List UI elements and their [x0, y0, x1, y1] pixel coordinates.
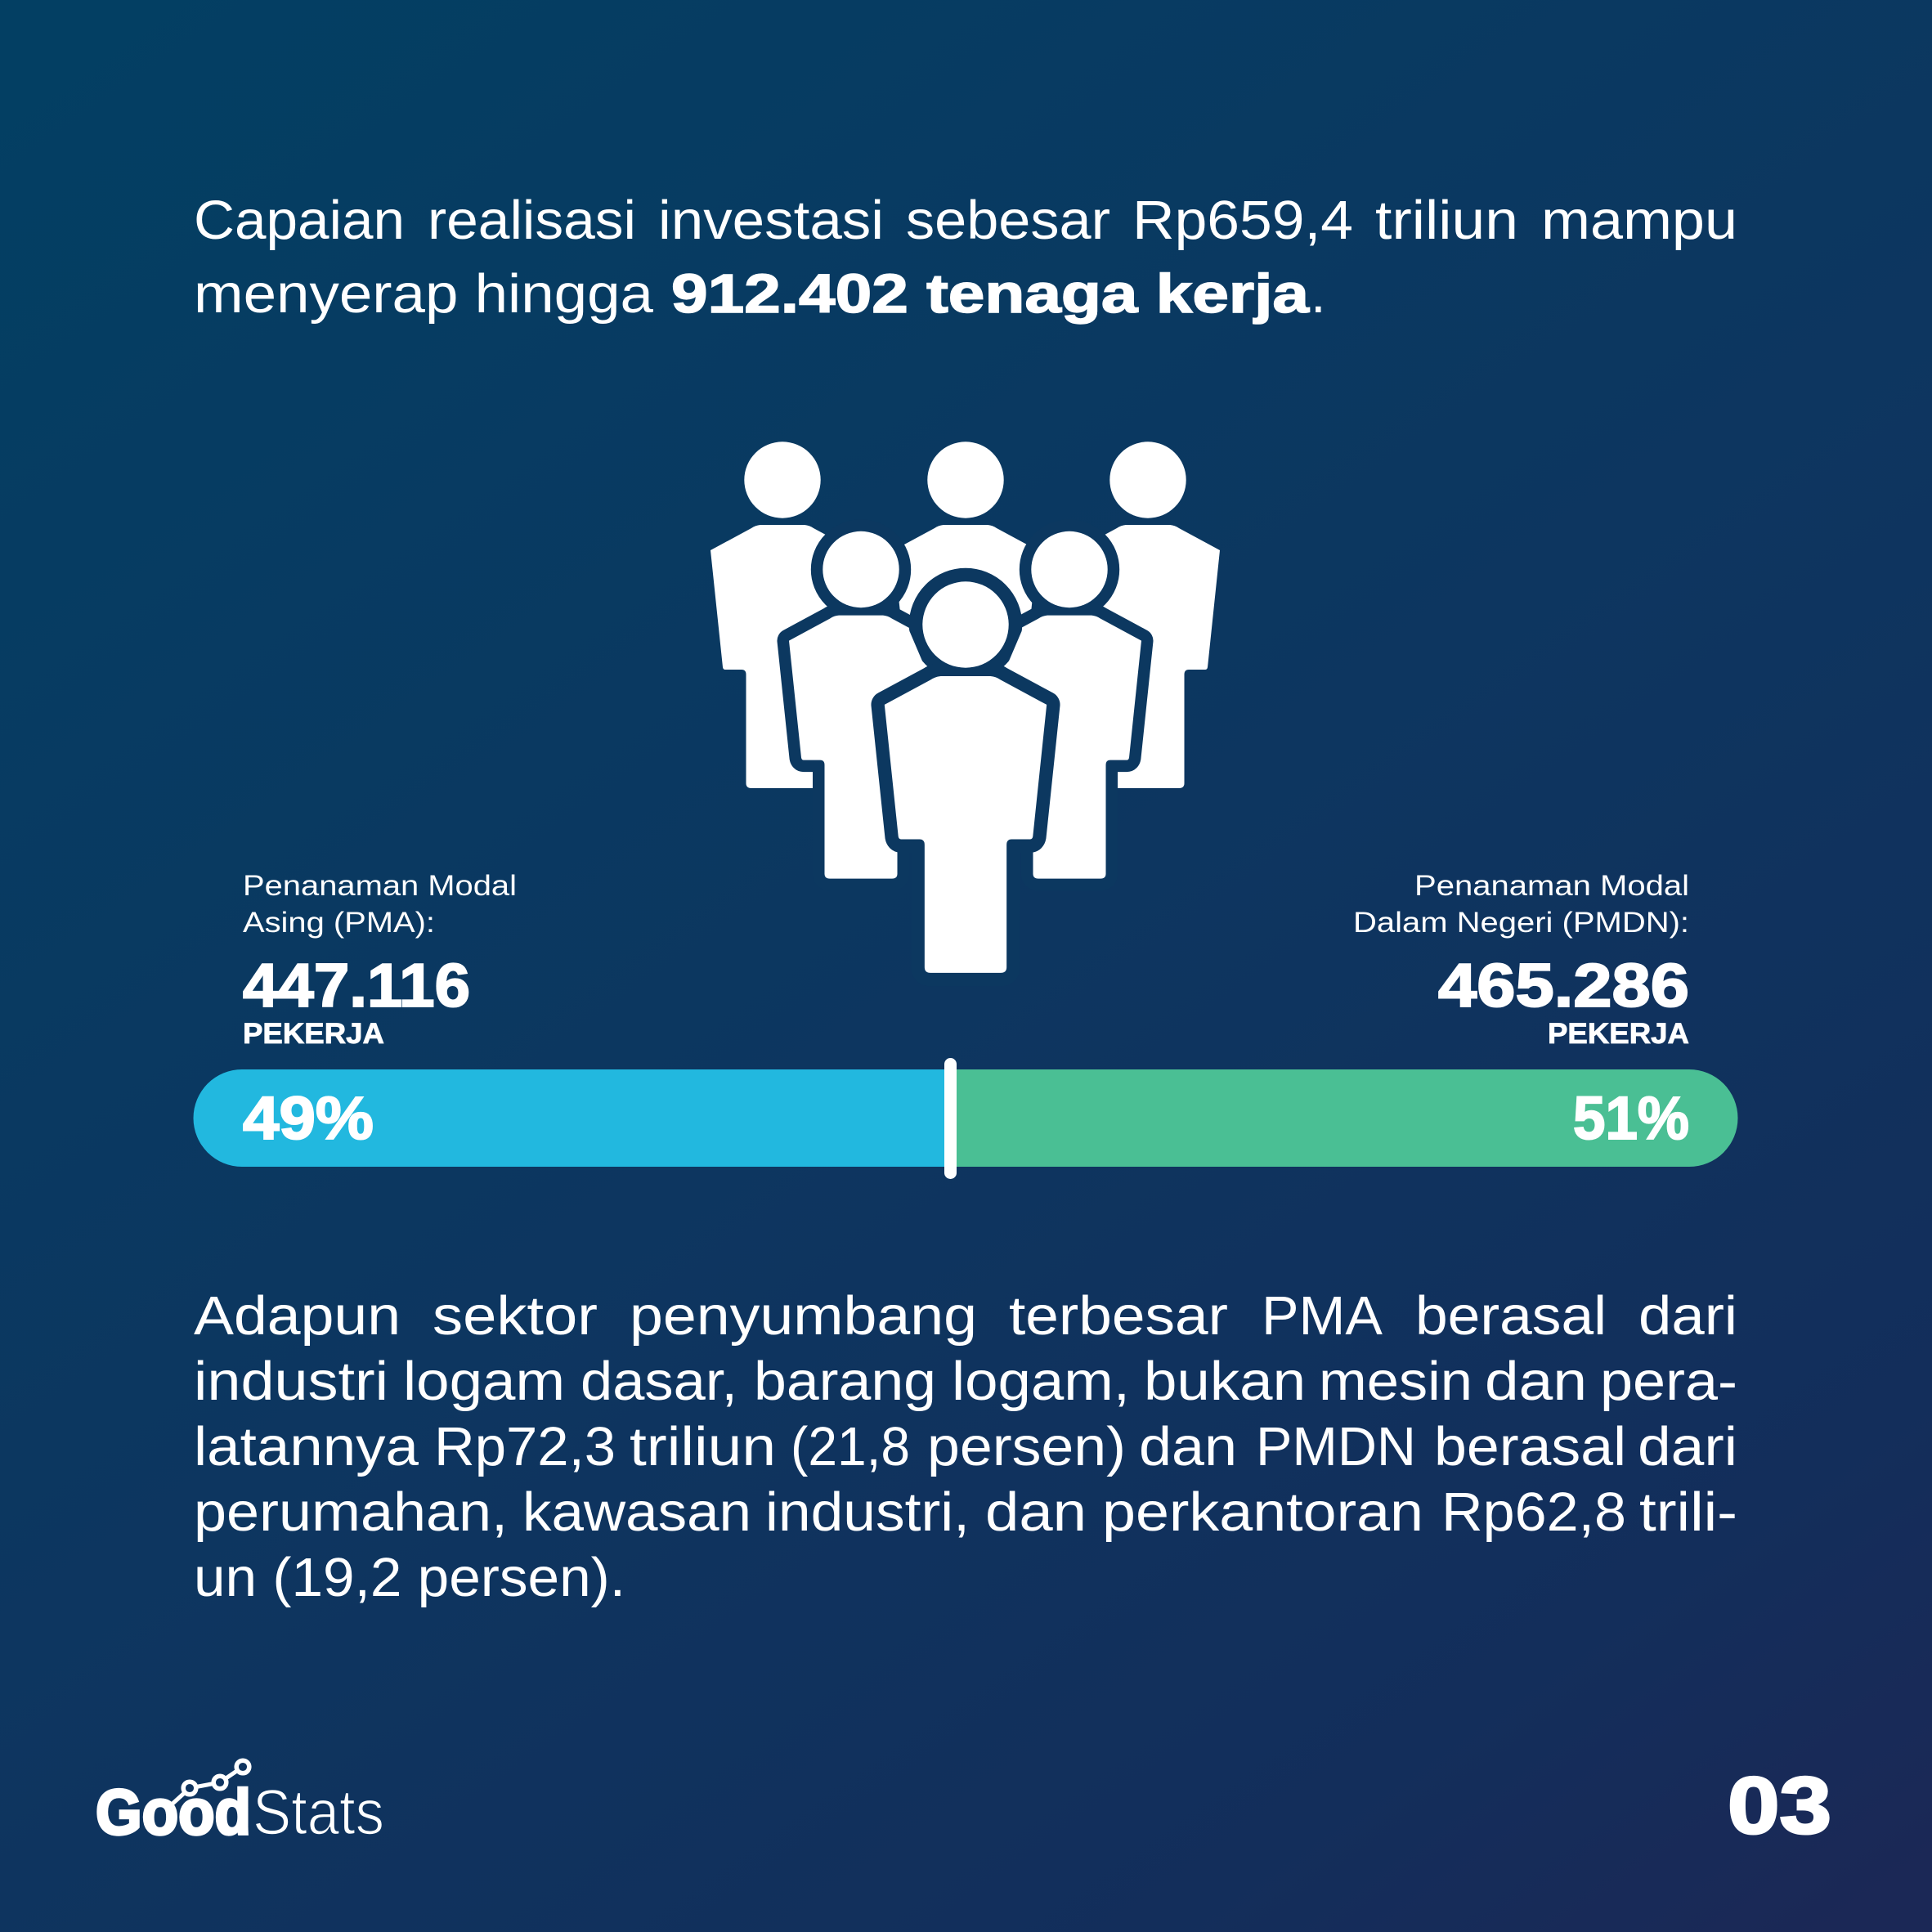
bar divider	[944, 1058, 957, 1179]
sector paragraph: berasal	[1415, 1285, 1607, 1347]
sector paragraph: perkantoran	[1102, 1481, 1423, 1543]
sector paragraph: kawasan	[522, 1481, 751, 1543]
PMDN label block: Dalam Negeri (PMDN):	[1353, 907, 1689, 939]
sector paragraph: penyumbang	[630, 1285, 977, 1347]
intro paragraph: mampu	[1541, 190, 1737, 251]
intro paragraph	[194, 190, 1737, 325]
intro paragraph: menyerap hingga	[194, 263, 654, 325]
sector paragraph: dan	[1139, 1416, 1237, 1477]
sector paragraph: industri	[194, 1351, 388, 1412]
sector paragraph: dan	[1485, 1351, 1587, 1412]
icon: middle row figures	[789, 531, 1141, 879]
intro paragraph: investasi	[658, 190, 884, 251]
intro paragraph: triliun	[1375, 190, 1518, 251]
sector paragraph: sektor	[433, 1285, 598, 1347]
sector paragraph: perumahan,	[194, 1481, 508, 1543]
sector paragraph: dasar,	[580, 1351, 737, 1412]
PMDN label block: PEKERJA	[1548, 1018, 1689, 1050]
value: 51%: 51%	[1573, 1084, 1689, 1152]
PMDN label block: Penanaman Modal	[1414, 870, 1689, 902]
sector paragraph: Adapun	[194, 1285, 401, 1347]
PMA label block	[243, 870, 517, 1050]
value: 49%: 49%	[243, 1084, 374, 1152]
sector paragraph: dari	[1638, 1285, 1737, 1347]
icon: front figure	[885, 581, 1047, 973]
logo: GoodStats: Stats	[253, 1776, 384, 1848]
sector paragraph: dan	[985, 1481, 1087, 1543]
sector paragraph: logam,	[952, 1351, 1130, 1412]
sector paragraph: pera-	[1600, 1351, 1737, 1412]
bar: PMA 49%	[194, 1069, 950, 1167]
PMDN label block	[1353, 870, 1689, 1050]
sector paragraph: industri,	[765, 1481, 970, 1543]
logo wordmark: Good	[96, 1776, 251, 1848]
sector paragraph: PMDN	[1256, 1416, 1416, 1477]
intro paragraph: Rp659,4	[1132, 190, 1353, 251]
split bar chart	[194, 1058, 1738, 1179]
PMA label block: 447.116	[243, 951, 470, 1020]
logo chart mark	[172, 1760, 249, 1804]
intro paragraph: sebesar	[906, 190, 1110, 251]
intro paragraph: .	[1311, 263, 1326, 325]
sector paragraph: berasal	[1434, 1416, 1626, 1477]
sector paragraph: barang	[754, 1351, 936, 1412]
sector paragraph: logam	[403, 1351, 565, 1412]
icon: group of workers	[710, 442, 1220, 973]
sector paragraph: un (19,2 persen).	[194, 1547, 625, 1608]
sector paragraph: triliun	[630, 1416, 776, 1477]
PMDN label block: 465.286	[1438, 951, 1689, 1020]
sector paragraph: Rp72,3	[434, 1416, 616, 1477]
sector paragraph: Rp62,8	[1441, 1481, 1626, 1543]
sector paragraph: latannya	[194, 1416, 419, 1477]
sector paragraph: bukan	[1144, 1351, 1306, 1412]
PMA label block: Penanaman Modal	[243, 870, 517, 902]
intro paragraph: 912.402 tenaga kerja	[671, 263, 1310, 325]
logo: GoodStats	[96, 1760, 384, 1848]
sector paragraph: terbesar	[1009, 1285, 1228, 1347]
sector paragraph	[194, 1285, 1737, 1608]
bar: PMDN 51%	[950, 1069, 1738, 1167]
sector paragraph: trili-	[1639, 1481, 1737, 1543]
sector paragraph: persen)	[927, 1416, 1126, 1477]
intro paragraph: Capaian	[194, 190, 405, 251]
PMA label block: PEKERJA	[243, 1018, 384, 1050]
sector paragraph: mesin	[1319, 1351, 1473, 1412]
icon: back row figures	[710, 442, 1220, 788]
sector paragraph: dari	[1638, 1416, 1737, 1477]
intro paragraph: realisasi	[428, 190, 636, 251]
sector paragraph: (21,8	[791, 1416, 910, 1477]
page number: 03	[1728, 1760, 1831, 1850]
PMA label block: Asing (PMA):	[243, 907, 435, 939]
sector paragraph: PMA	[1262, 1285, 1383, 1347]
